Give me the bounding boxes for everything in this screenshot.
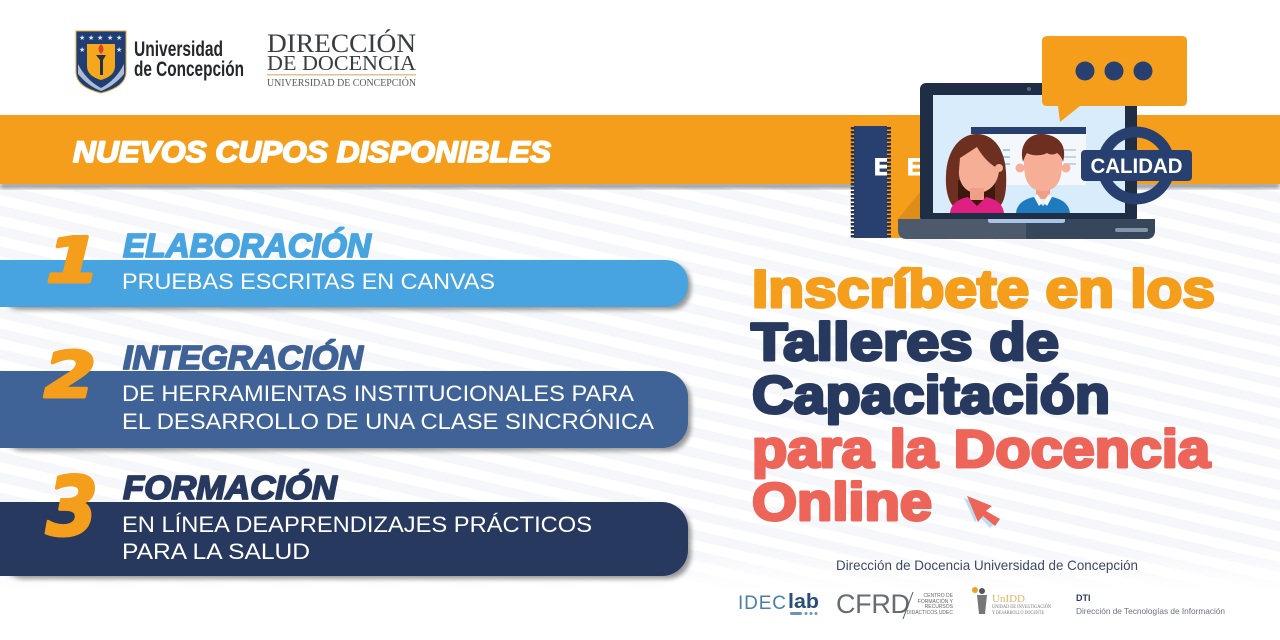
description 1: PRUEBAS ESCRITAS EN CANVAS: [122, 269, 495, 294]
icon: cursor arrow: [964, 496, 1000, 528]
logo: UnIDD: UnIDD: [992, 593, 1025, 605]
logo: DTI: [1076, 593, 1225, 616]
workshop 1: [0, 224, 691, 310]
logo: Universidad de Concepción: ★: [116, 46, 122, 54]
notebook: E: [907, 154, 923, 181]
logo: Universidad de Concepción: [76, 31, 244, 93]
logo: UnIDD: [972, 587, 1051, 616]
logo: DTI: DTI: [1076, 593, 1090, 603]
orange backing: [887, 184, 920, 238]
logo: IDEClab: lab: [788, 591, 819, 613]
logo: Universidad de Concepción: ★: [79, 46, 85, 54]
logo: CFRD: DIDÁCTICOS UDEC: [907, 609, 953, 616]
speech bubble: [1042, 36, 1187, 122]
logo: IDEClab: IDEC: [738, 593, 786, 614]
logo: Dirección de Docencia: DIRECCIÓN: [267, 29, 416, 58]
logo: Dirección de Docencia: UNIVERSIDAD DE CONCEPCIÓN: [267, 77, 416, 89]
illustration: laptop with video call: [852, 36, 1192, 239]
badge: calidad: [1081, 132, 1192, 199]
logo: CFRD: CENTRO DE: [924, 593, 954, 599]
logo: CFRD: FORMACIÓN Y: [918, 598, 954, 605]
logo: Universidad de Concepción: ★: [88, 34, 94, 42]
notebook: E: [874, 154, 890, 181]
main title: Online: [752, 473, 932, 532]
description 3: PARA LA SALUD: [122, 539, 310, 564]
description 2: DE HERRAMIENTAS INSTITUCIONALES PARA: [122, 381, 634, 406]
logo: Dirección de Docencia: DE DOCENCIA: [267, 51, 417, 75]
logo: Universidad de Concepción: ★: [116, 34, 122, 42]
logo: Universidad de Concepción: ★: [107, 34, 113, 42]
partner logos: [738, 587, 1225, 619]
logo: CFRD: RECURSOS: [925, 604, 954, 610]
laptop body: [898, 83, 1155, 239]
logo: Universidad de Concepción: ★: [97, 34, 103, 42]
description 3: [122, 512, 592, 564]
heading 2: INTEGRACIÓN: [123, 339, 364, 376]
heading 1: ELABORACIÓN: [123, 227, 372, 264]
logo: Universidad de Concepción: ★: [79, 34, 85, 42]
heading 3: FORMACIÓN: [123, 469, 338, 506]
main title: Capacitación: [752, 366, 1110, 425]
credit line: Dirección de Docencia Universidad de Concepción: [836, 557, 1138, 573]
man: [1016, 134, 1070, 213]
main title: Inscríbete en los: [752, 260, 1215, 319]
notebook: [852, 126, 923, 238]
number 1: 1: [46, 224, 100, 297]
logo: Dirección de Docencia: [267, 29, 417, 89]
description 3: EN LÍNEA DEAPRENDIZAJES PRÁCTICOS: [122, 512, 592, 537]
orange banner: [0, 115, 1280, 188]
logo: DTI: Dirección de Tecnologías de Información: [1076, 606, 1225, 616]
logo: Universidad de Concepción: Universidad: [134, 38, 223, 61]
logo: UnIDD: UNIDAD DE INVESTIGACIÓN: [992, 604, 1051, 610]
number 3: 3: [46, 461, 98, 555]
number 2: 2: [44, 339, 96, 412]
woman: [946, 134, 1006, 213]
banner heading: NUEVOS CUPOS DISPONIBLES: [73, 136, 551, 169]
logo: Universidad de Concepción: de Concepción: [134, 58, 244, 81]
workshop 3: [0, 461, 691, 579]
logo: IDEClab: [738, 591, 819, 615]
workshop 2: [0, 339, 691, 451]
shared window: [971, 127, 1086, 185]
description 2: [122, 381, 654, 434]
logo: CFRD: CFRD: [836, 589, 910, 619]
logo: CFRD: [836, 589, 954, 619]
main title: para la Docencia: [752, 420, 1211, 479]
logo: UnIDD: Y DESARROLLO DOCENTE: [992, 611, 1044, 616]
main title: Talleres de: [751, 313, 1059, 372]
description 2: EL DESARROLLO DE UNA CLASE SINCRÓNICA: [122, 409, 654, 434]
badge: calidad: CALIDAD: [1090, 155, 1182, 178]
main title: [751, 260, 1215, 532]
